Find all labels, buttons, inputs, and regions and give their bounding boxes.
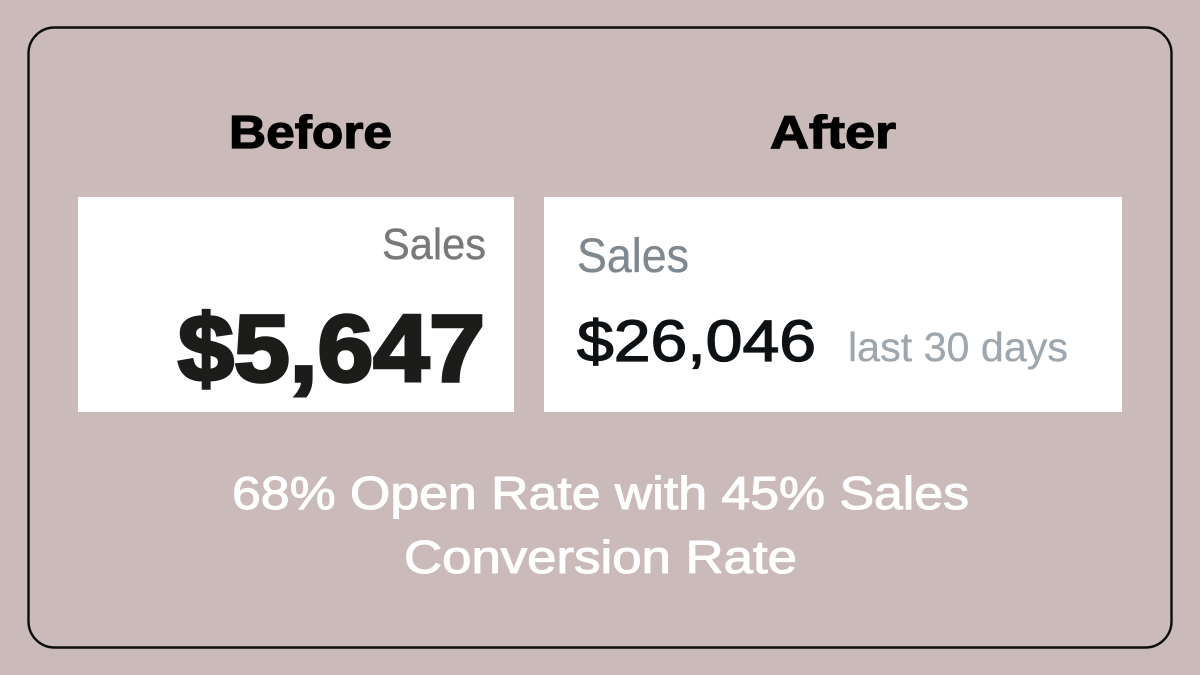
heading: Before: Before xyxy=(229,106,392,158)
caption: open rate and conversion rate: 68% Open Rate with 45% Sales xyxy=(232,467,969,519)
value: before sales amount: $5,647 xyxy=(178,296,485,402)
label: before sales: Sales xyxy=(382,220,486,269)
panel: after sales card xyxy=(544,197,1122,412)
caption: open rate and conversion rate: Conversion Rate xyxy=(404,531,797,583)
heading: After: After xyxy=(770,106,896,158)
label: after sales: Sales xyxy=(577,230,689,283)
value: after sales amount: $26,046 xyxy=(577,309,816,374)
note: last 30 days: last 30 days xyxy=(848,324,1068,370)
caption: open rate and conversion rate xyxy=(232,467,969,583)
panel: before sales card xyxy=(78,197,514,412)
